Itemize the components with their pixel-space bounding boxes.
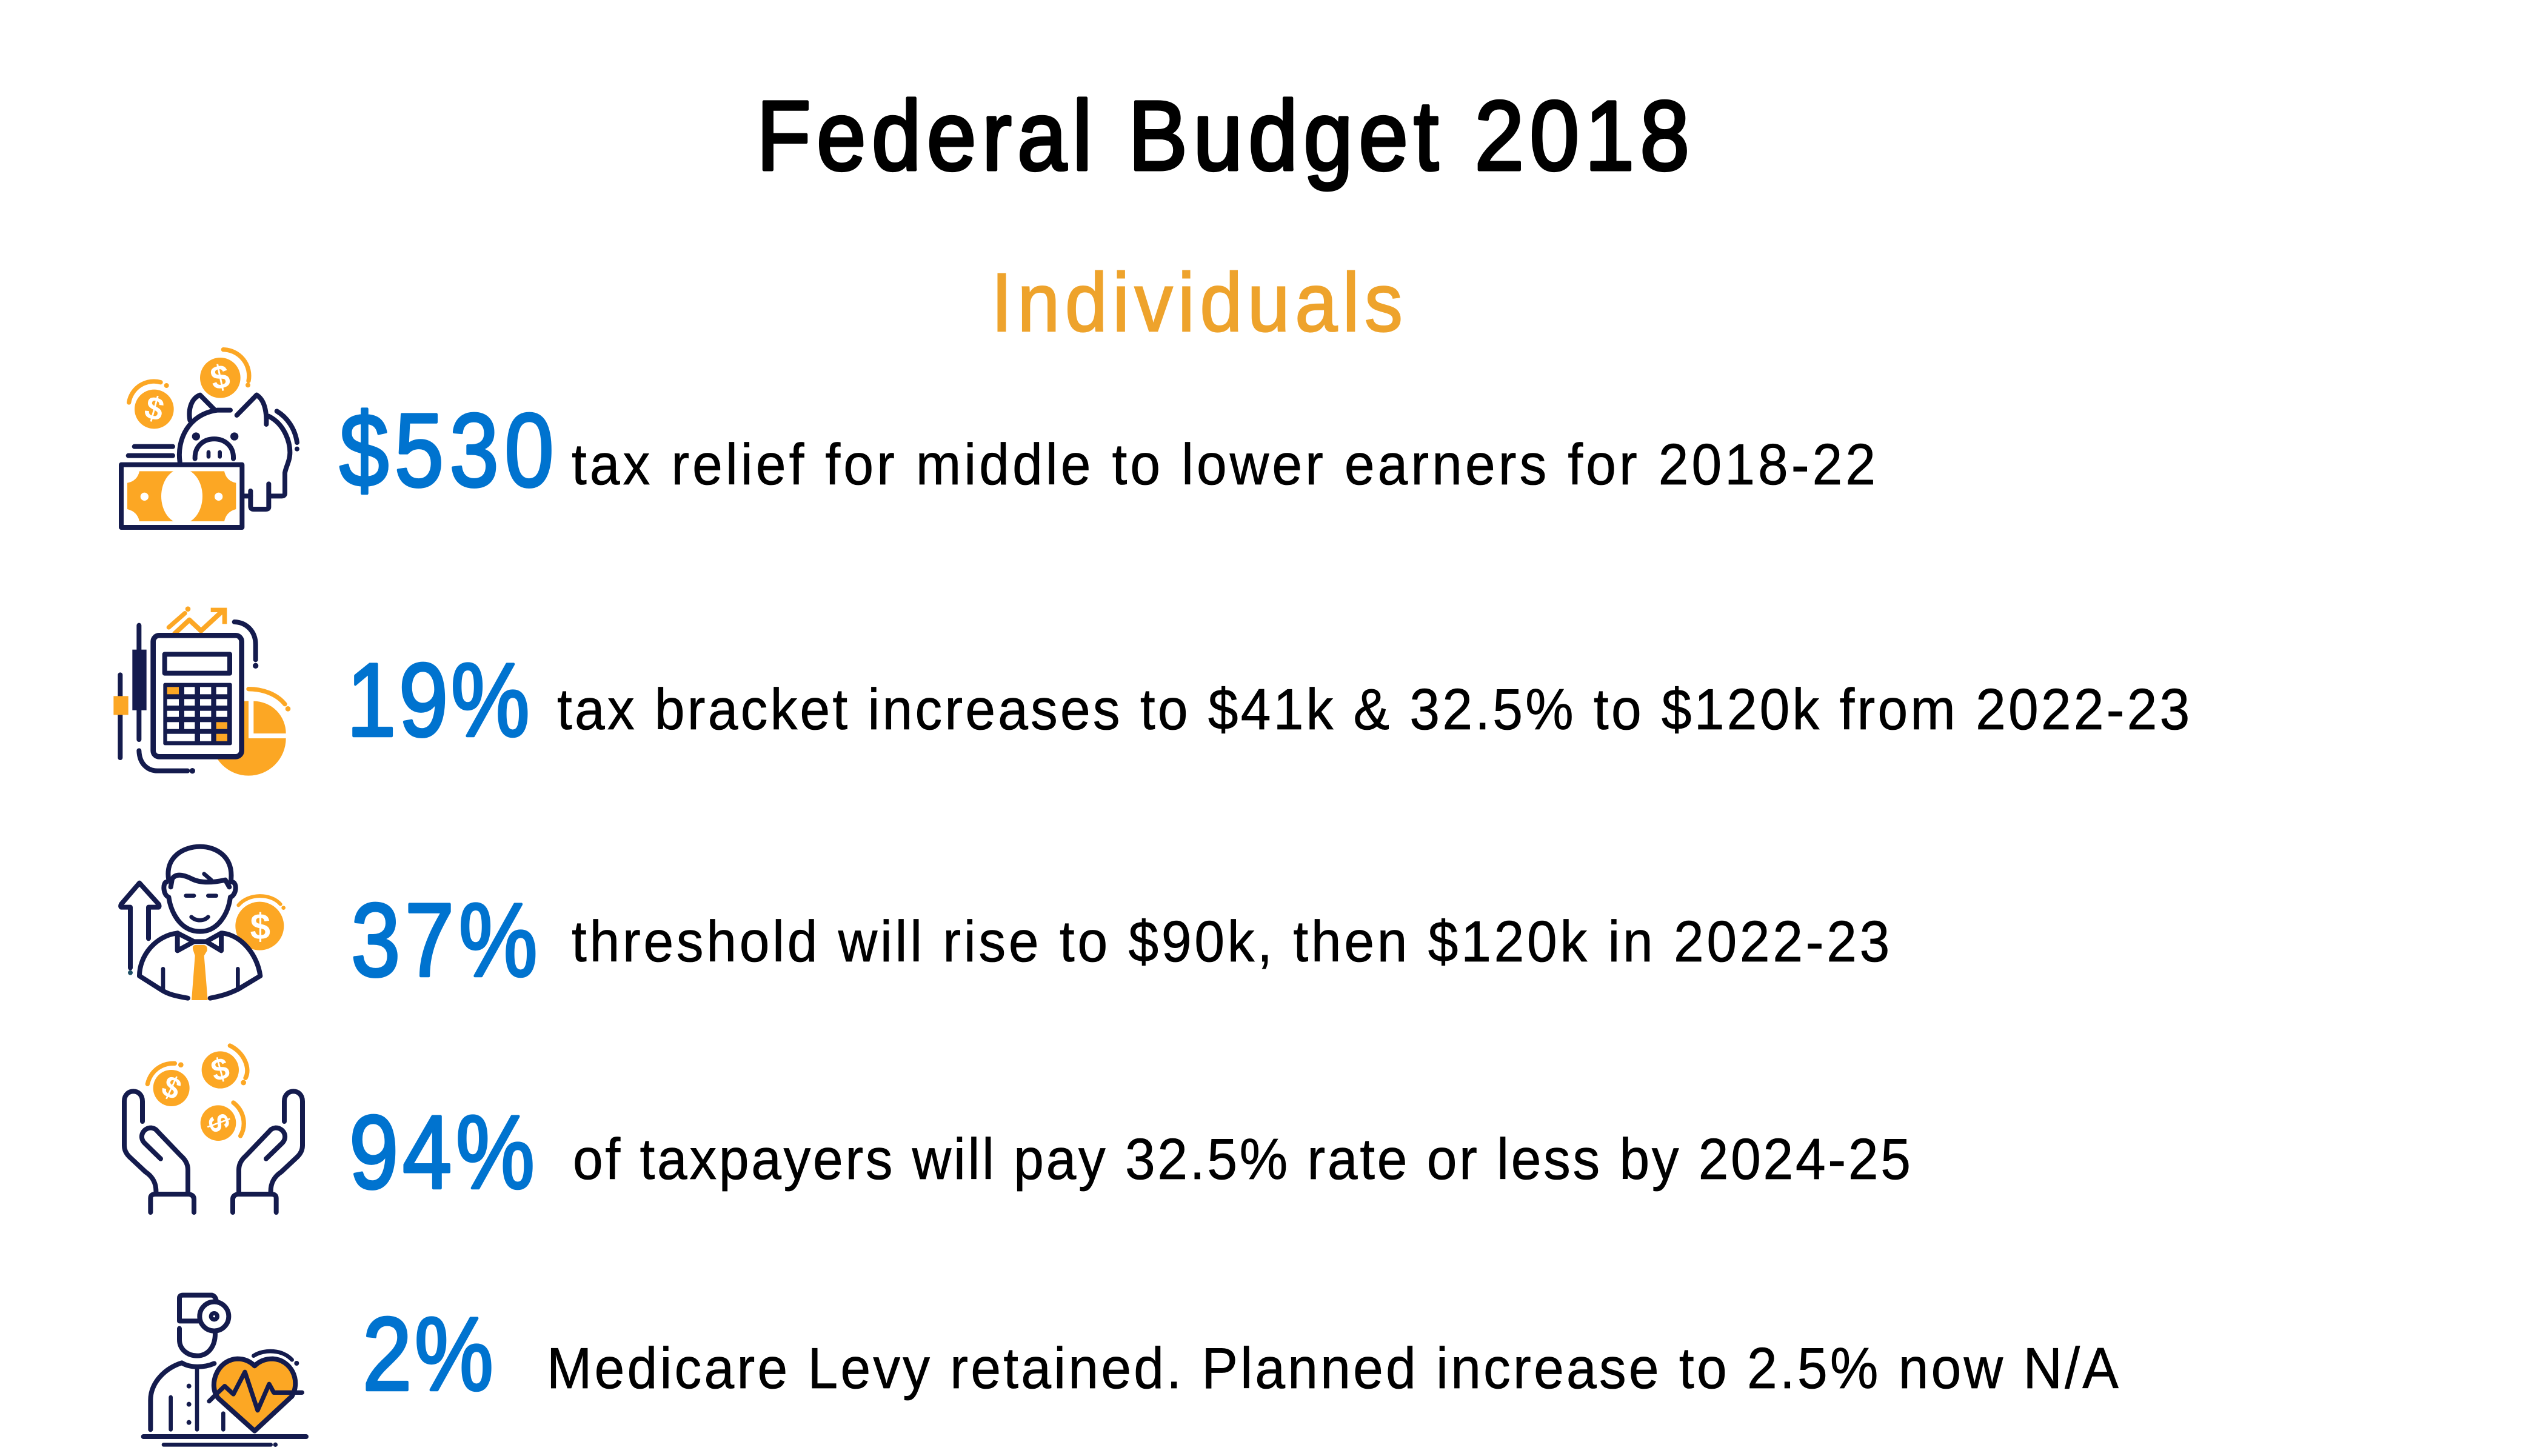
stat: 37%: 37% <box>351 882 538 998</box>
stat: 19%: 19% <box>347 642 530 758</box>
text: threshold: threshold will rise to $90k, then $120k in 2022-23 <box>572 909 1889 974</box>
icon: calculator with charts <box>113 606 290 776</box>
icon: piggy bank with banknote and coins: $ <box>141 389 167 429</box>
stat: $530: $530 <box>339 392 554 509</box>
icon: hands and falling coins: $ <box>207 1050 233 1088</box>
section heading: Individuals: Individuals <box>991 256 1403 349</box>
icon: businessman with rising arrow and coin: $ <box>250 906 270 947</box>
icon: piggy bank with banknote and coins <box>121 350 299 527</box>
stat: 94%: 94% <box>349 1094 535 1211</box>
text: tax bracket: tax bracket increases to $41k & 32.5% to $120k from 2022-23 <box>557 676 2190 742</box>
icon: hands and falling coins: $ <box>201 1110 237 1136</box>
stat: 2%: 2% <box>363 1296 493 1412</box>
icon: piggy bank with banknote and coins: $ <box>207 357 233 398</box>
title: Federal Budget 2018 <box>757 81 1689 191</box>
icon: doctor with heart <box>144 1295 306 1447</box>
text: taxpayers: of taxpayers will pay 32.5% rate or less by 2024-25 <box>573 1126 1911 1192</box>
icon: hands and falling coins <box>124 1046 302 1212</box>
icon: businessman with rising arrow and coin <box>121 847 286 1000</box>
icon: hands and falling coins: $ <box>157 1069 187 1106</box>
text: tax relief: tax relief for middle to lower earners for 2018-22 <box>572 432 1876 497</box>
text: Medicare Levy: Medicare Levy retained. Planned increase to 2.5% now N/A <box>547 1335 2119 1401</box>
